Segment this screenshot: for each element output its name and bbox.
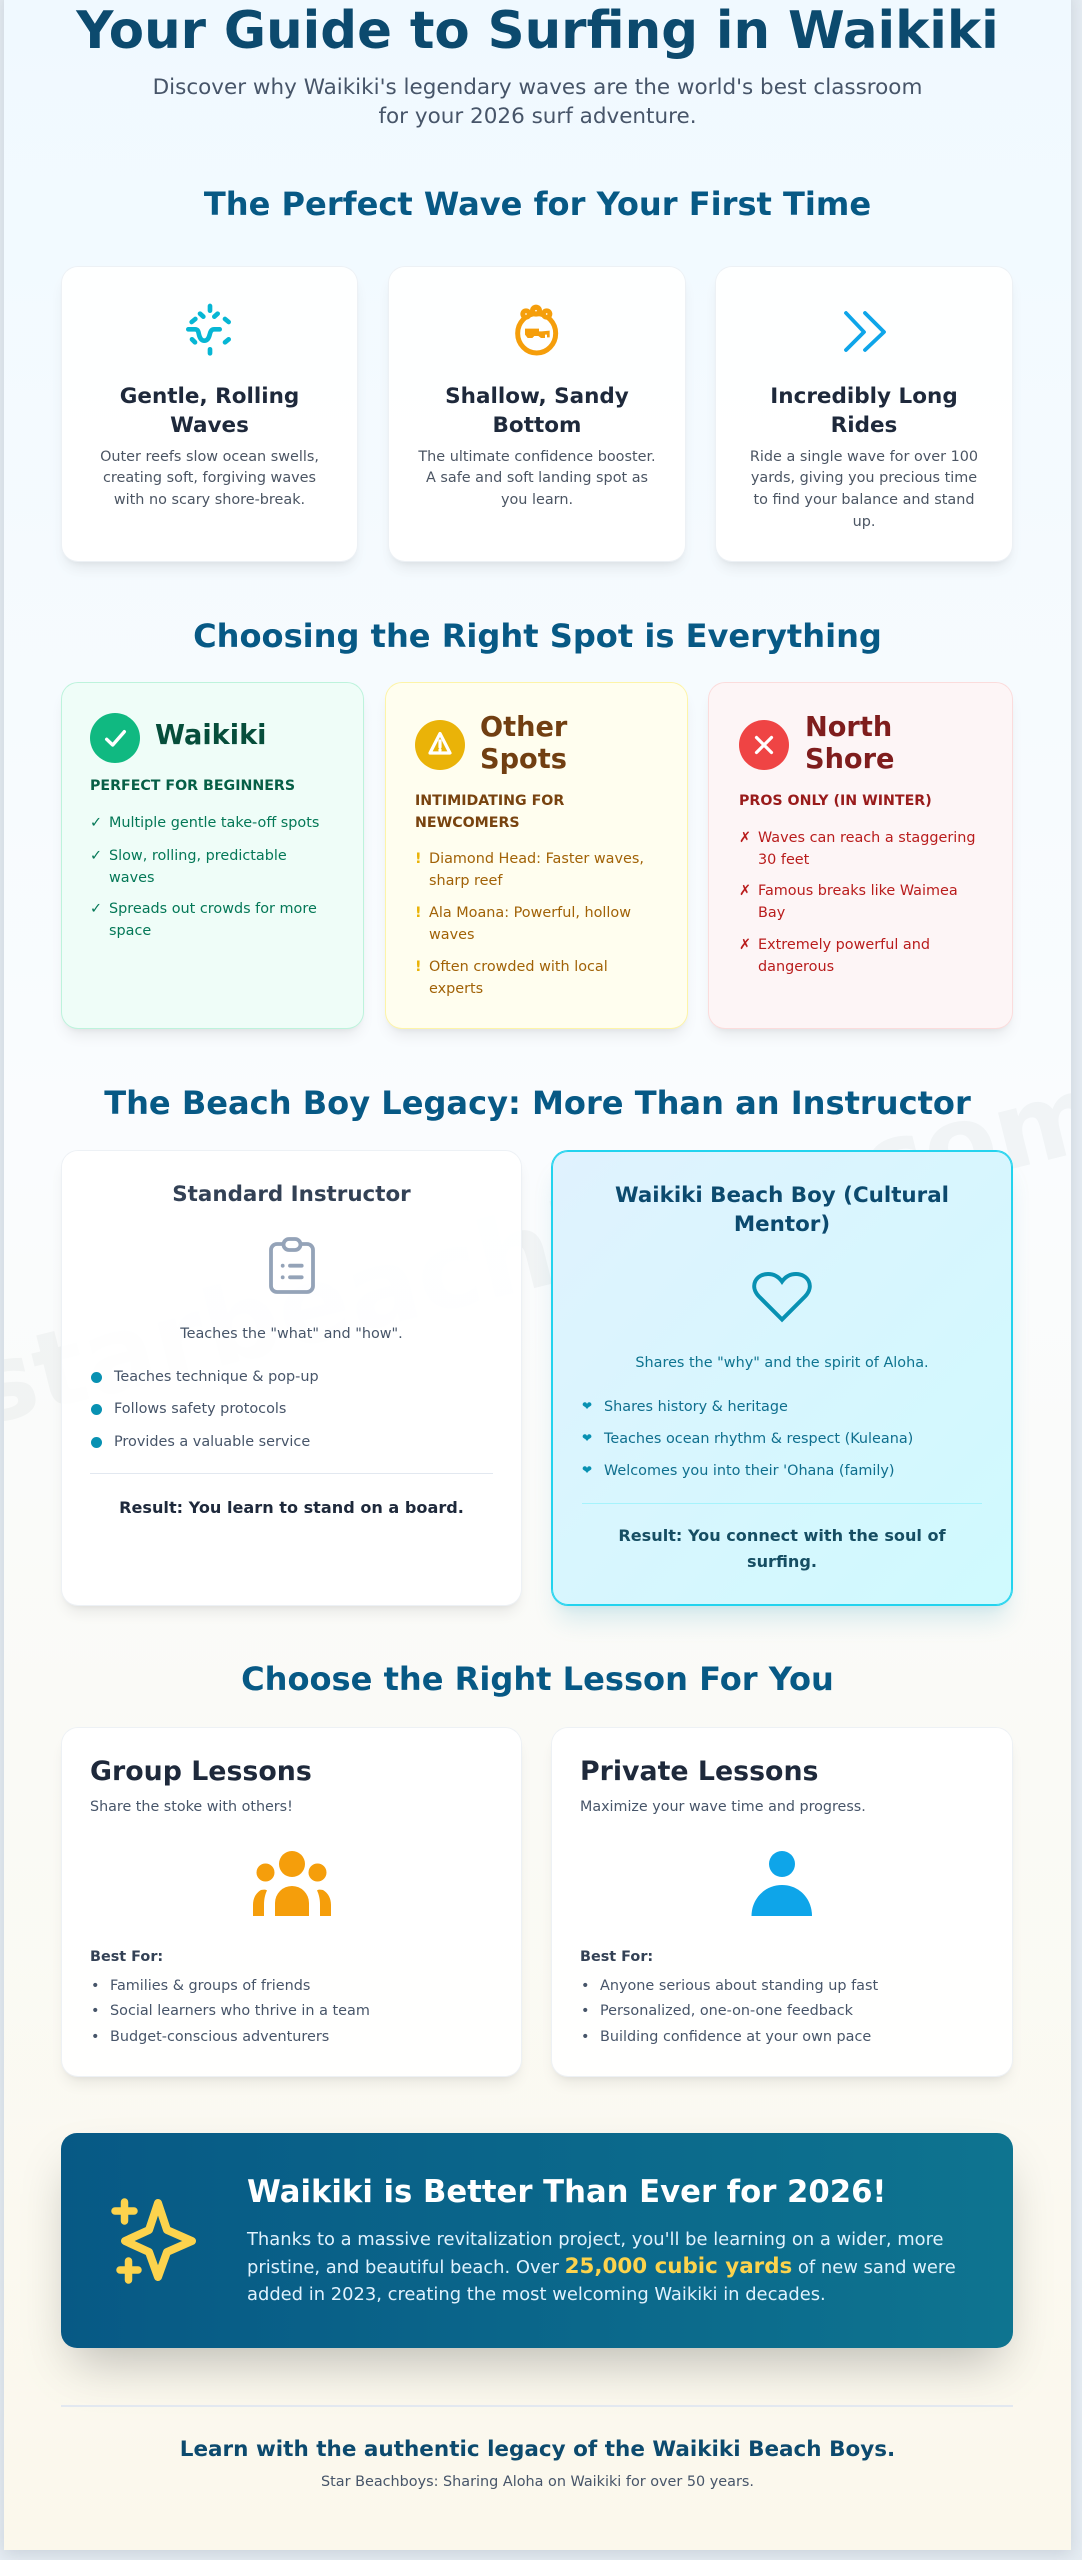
heading: perfect wave: The Perfect Wave for Your First Time bbox=[204, 185, 871, 223]
item: Famous breaks like Waimea bbox=[758, 883, 958, 899]
instructor title bbox=[615, 1182, 949, 1236]
subtitle bbox=[153, 75, 922, 129]
icon: person bbox=[752, 1851, 812, 1916]
item: 30 feet bbox=[758, 852, 809, 868]
card text bbox=[750, 448, 978, 530]
card text: Ride a single wave for over 100 bbox=[750, 448, 978, 464]
card title: Waves bbox=[170, 413, 249, 438]
item: ❤ bbox=[582, 1398, 592, 1412]
list: best for: Social learners who thrive in a team bbox=[110, 2003, 370, 2019]
best for label: Best For: bbox=[580, 1949, 653, 1965]
list: best for: • bbox=[581, 2029, 590, 2045]
item: ! bbox=[415, 905, 422, 921]
banner text: pristine, and beautiful beach. Over 25,000 cubic yards of new sand were bbox=[247, 2254, 956, 2278]
banner title: Waikiki is Better Than Ever for 2026! bbox=[247, 2175, 886, 2210]
list: best for: Building confidence at your own pace bbox=[600, 2029, 871, 2045]
item: dangerous bbox=[758, 959, 834, 975]
card title bbox=[770, 384, 958, 438]
item: Slow, rolling, predictable bbox=[109, 848, 287, 864]
card title: Incredibly Long bbox=[770, 384, 958, 409]
result bbox=[618, 1526, 946, 1571]
lesson tagline: Share the stoke with others! bbox=[90, 1799, 293, 1815]
item bbox=[90, 901, 317, 939]
panel: shallow sandy bottom bbox=[389, 267, 685, 561]
card text: to find your balance and stand bbox=[754, 492, 974, 508]
spot verdict: NEWCOMERS bbox=[415, 815, 520, 831]
list: best for: Budget-conscious adventurers bbox=[110, 2029, 329, 2045]
item: ❤ bbox=[582, 1430, 592, 1444]
result: Result: You learn to stand on a board. bbox=[119, 1498, 464, 1517]
item: Follows safety protocols bbox=[114, 1400, 286, 1416]
item: Often crowded with local bbox=[429, 959, 608, 975]
spot name: Waikiki bbox=[155, 720, 266, 751]
panel: Waikiki bbox=[62, 683, 363, 1028]
lesson title: Private Lessons bbox=[580, 1756, 818, 1787]
item bbox=[739, 937, 930, 975]
spot verdict: PERFECT FOR BEGINNERS bbox=[90, 778, 295, 794]
item: ✗ bbox=[739, 830, 751, 846]
list: best for: Personalized, one-on-one feedback bbox=[600, 2003, 853, 2019]
item: Shares history & heritage bbox=[604, 1398, 788, 1414]
icon: wave bbox=[186, 304, 231, 356]
list: best for: • bbox=[91, 1978, 100, 1994]
item: sharp reef bbox=[429, 873, 502, 889]
card text: yards, giving you precious time bbox=[751, 470, 977, 486]
card text: Outer reefs slow ocean swells, bbox=[100, 448, 319, 464]
panel: group lessons bbox=[62, 1728, 521, 2076]
list: best for: Anyone serious about standing up fast bbox=[600, 1978, 878, 1994]
item bbox=[415, 905, 631, 943]
spot name: Spots bbox=[480, 744, 567, 775]
lesson tagline: Maximize your wave time and progress. bbox=[580, 1799, 866, 1815]
footer headline: Learn with the authentic legacy of the Waikiki Beach Boys. bbox=[180, 2437, 895, 2462]
icon: check bbox=[90, 713, 140, 763]
card title: Shallow, Sandy bbox=[445, 384, 629, 409]
list: best for: Families & groups of friends bbox=[110, 1978, 310, 1994]
card title bbox=[120, 384, 299, 438]
card text: A safe and soft landing spot as bbox=[426, 470, 648, 486]
item: Teaches technique & pop-up bbox=[114, 1368, 319, 1384]
panel: standard instructor bbox=[62, 1151, 521, 1605]
item: Diamond Head: Faster waves, bbox=[429, 851, 644, 867]
item: ✓ bbox=[90, 901, 102, 917]
item bbox=[90, 848, 287, 886]
item: ❤ bbox=[582, 1462, 592, 1476]
icon: group bbox=[253, 1851, 331, 1916]
banner text: added in 2023, creating the most welcoming Waikiki in decades. bbox=[247, 2284, 826, 2304]
icon: sandy bottom bbox=[515, 304, 558, 356]
item: Welcomes you into their 'Ohana (family) bbox=[604, 1462, 895, 1478]
role summary: Teaches the "what" and "how". bbox=[180, 1326, 403, 1342]
item: ✗ bbox=[739, 883, 751, 899]
item: Waves can reach a staggering bbox=[758, 830, 976, 846]
item: ✗ bbox=[739, 937, 751, 953]
item: experts bbox=[429, 981, 483, 997]
spot name: North bbox=[805, 712, 892, 743]
icon: clipboard bbox=[269, 1237, 315, 1294]
item: Ala Moana: Powerful, hollow bbox=[429, 905, 631, 921]
spot name bbox=[805, 712, 894, 775]
best for label: Best For: bbox=[90, 1949, 163, 1965]
panel: private lessons bbox=[552, 1728, 1012, 2076]
icon: cross bbox=[739, 720, 789, 770]
card title: Gentle, Rolling bbox=[120, 384, 299, 409]
list: best for: • bbox=[91, 2029, 100, 2045]
list: best for bbox=[91, 1978, 370, 2045]
instructor title: Standard Instructor bbox=[172, 1182, 411, 1206]
card title bbox=[445, 384, 629, 438]
panel: long rides bbox=[716, 267, 1012, 561]
icon: heart bbox=[752, 1272, 812, 1322]
item: Extremely powerful and bbox=[758, 937, 930, 953]
card text: up. bbox=[853, 514, 875, 530]
item: Bay bbox=[758, 905, 785, 921]
item: Provides a valuable service bbox=[114, 1434, 310, 1450]
card text: creating soft, forgiving waves bbox=[103, 470, 316, 486]
footer note: Star Beachboys: Sharing Aloha on Waikiki for over 50 years. bbox=[321, 2474, 754, 2490]
card text: The ultimate confidence booster. bbox=[418, 448, 656, 464]
card title: Rides bbox=[831, 413, 897, 438]
spot name: Other bbox=[480, 712, 567, 743]
list: best for: • bbox=[581, 2003, 590, 2019]
list: best for bbox=[581, 1978, 878, 2045]
panel: gentle rolling waves bbox=[62, 267, 357, 561]
instructor title: Mentor) bbox=[734, 1212, 830, 1236]
item bbox=[415, 959, 608, 997]
lesson title: Group Lessons bbox=[90, 1756, 312, 1787]
item: Multiple gentle take-off spots bbox=[109, 815, 319, 831]
spot verdict: PROS ONLY (IN WINTER) bbox=[739, 793, 932, 809]
heading: lessons: Choose the Right Lesson For You bbox=[241, 1660, 834, 1698]
banner text bbox=[246, 2228, 956, 2304]
item: space bbox=[109, 923, 151, 939]
card text bbox=[418, 448, 656, 508]
card title: Bottom bbox=[493, 413, 581, 438]
instructor title: Waikiki Beach Boy (Cultural bbox=[615, 1182, 949, 1208]
item: ✓ bbox=[90, 815, 102, 831]
item bbox=[415, 851, 644, 889]
result: Result: You connect with the soul of bbox=[618, 1526, 946, 1545]
panel: beach boy bbox=[552, 1151, 1012, 1605]
item: Teaches ocean rhythm & respect (Kuleana) bbox=[604, 1430, 913, 1446]
list: best for: • bbox=[581, 1978, 590, 1994]
subtitle: Discover why Waikiki's legendary waves are the world's best classroom bbox=[153, 75, 922, 100]
heading: right spot: Choosing the Right Spot is Everything bbox=[193, 617, 882, 655]
item bbox=[739, 830, 976, 868]
panel: 2026 banner bbox=[61, 2133, 1013, 2348]
spot verdict bbox=[415, 793, 564, 831]
card text: with no scary shore-break. bbox=[114, 492, 305, 508]
item: ! bbox=[415, 851, 422, 867]
card text: you learn. bbox=[501, 492, 573, 508]
spot name: Shore bbox=[805, 744, 894, 775]
item: waves bbox=[109, 870, 154, 886]
result: surfing. bbox=[747, 1552, 817, 1571]
subtitle: for your 2026 surf adventure. bbox=[378, 104, 697, 129]
spot name bbox=[480, 712, 568, 775]
item: ✓ bbox=[90, 848, 102, 864]
panel: other spots bbox=[386, 683, 687, 1028]
icon: chevrons bbox=[844, 311, 886, 352]
spot verdict: INTIMIDATING FOR bbox=[415, 793, 564, 809]
item: ! bbox=[415, 959, 422, 975]
role summary: Shares the "why" and the spirit of Aloha. bbox=[635, 1355, 929, 1371]
panel: north shore bbox=[709, 683, 1012, 1028]
icon: sparkles bbox=[111, 2198, 196, 2284]
card text bbox=[100, 448, 319, 508]
banner text: Thanks to a massive revitalization project, you'll be learning on a wider, more bbox=[247, 2228, 944, 2250]
item: Spreads out crowds for more bbox=[109, 901, 317, 917]
heading: legacy: The Beach Boy Legacy: More Than an Instructor bbox=[104, 1084, 971, 1122]
item bbox=[739, 883, 958, 921]
list: best for: • bbox=[91, 2003, 100, 2019]
title: Your Guide to Surfing in Waikiki bbox=[76, 1, 999, 61]
icon: warning bbox=[415, 720, 465, 770]
item: waves bbox=[429, 927, 474, 943]
